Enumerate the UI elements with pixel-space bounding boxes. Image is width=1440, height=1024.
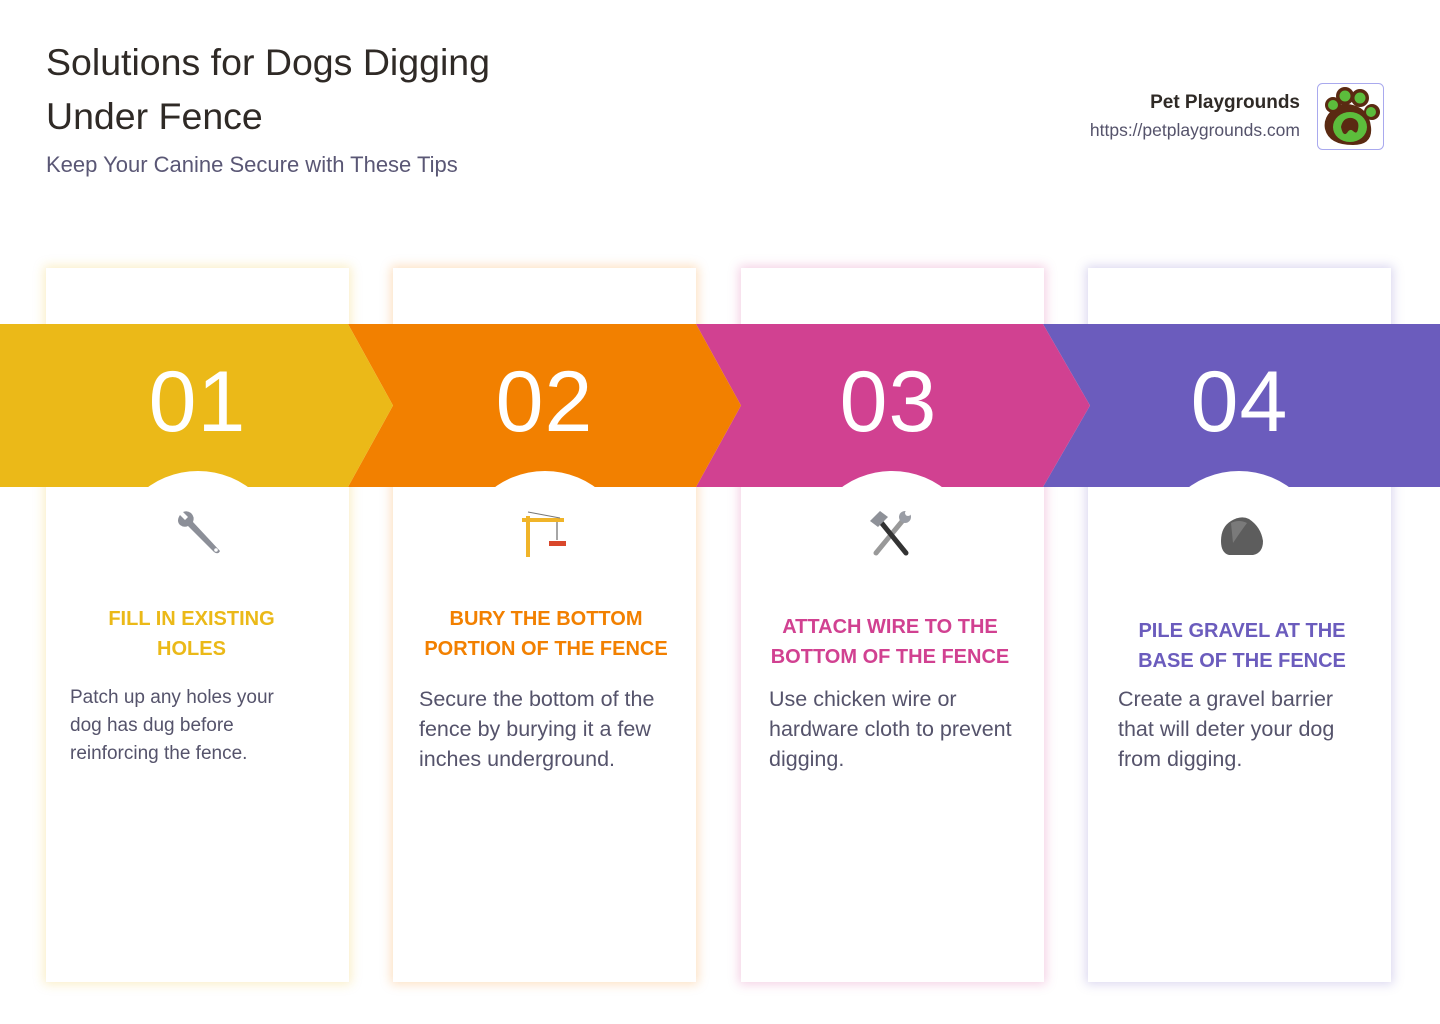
icon: wrench — [178, 511, 220, 554]
step 3 heading — [771, 616, 1009, 668]
step 2 heading — [424, 608, 668, 660]
panel: card 2 — [393, 268, 696, 982]
subtitle: Keep Your Canine Secure with These Tips — [46, 152, 458, 177]
step 4 heading — [1138, 620, 1346, 672]
step 3 heading: BOTTOM OF THE FENCE — [771, 646, 1009, 668]
title — [46, 41, 490, 137]
brand name: Pet Playgrounds — [1150, 92, 1300, 113]
number 01: 01 — [149, 354, 246, 450]
logo — [1317, 83, 1384, 150]
title: Under Fence — [46, 95, 263, 137]
step 1 text: Patch up any holes your dog has dug before reinforcing the fence. — [70, 687, 274, 764]
brand url: https://petplaygrounds.com — [1090, 120, 1300, 140]
arrow band — [0, 324, 1440, 487]
panel: card 3 — [741, 268, 1044, 982]
step 3 text: Use chicken wire or hardware cloth to prevent digging. — [769, 687, 1012, 771]
step 4 heading: PILE GRAVEL AT THE — [1138, 620, 1346, 642]
step 2 text: Secure the bottom of the fence by burying it a few inches underground. — [419, 687, 654, 771]
panel: card 1 — [46, 268, 349, 982]
brand block — [1090, 83, 1384, 150]
step 1 heading — [108, 608, 275, 660]
step 2 heading: PORTION OF THE FENCE — [424, 638, 668, 660]
step 4 heading: BASE OF THE FENCE — [1138, 650, 1346, 672]
step 1 heading: HOLES — [157, 638, 226, 660]
step 2 heading: BURY THE BOTTOM — [450, 608, 642, 630]
icon: crane — [522, 512, 566, 557]
icon: hammer and wrench — [870, 511, 911, 556]
panel: card 4 — [1088, 268, 1391, 982]
number 03: 03 — [840, 354, 937, 450]
icon: rock — [1221, 517, 1263, 555]
step 1 heading: FILL IN EXISTING — [108, 608, 275, 630]
step 3 heading: ATTACH WIRE TO THE — [782, 616, 998, 638]
number 04: 04 — [1191, 354, 1288, 450]
number 02: 02 — [496, 354, 593, 450]
title: Solutions for Dogs Digging — [46, 41, 490, 83]
step 4 text: Create a gravel barrier that will deter your dog from digging. — [1118, 687, 1334, 771]
